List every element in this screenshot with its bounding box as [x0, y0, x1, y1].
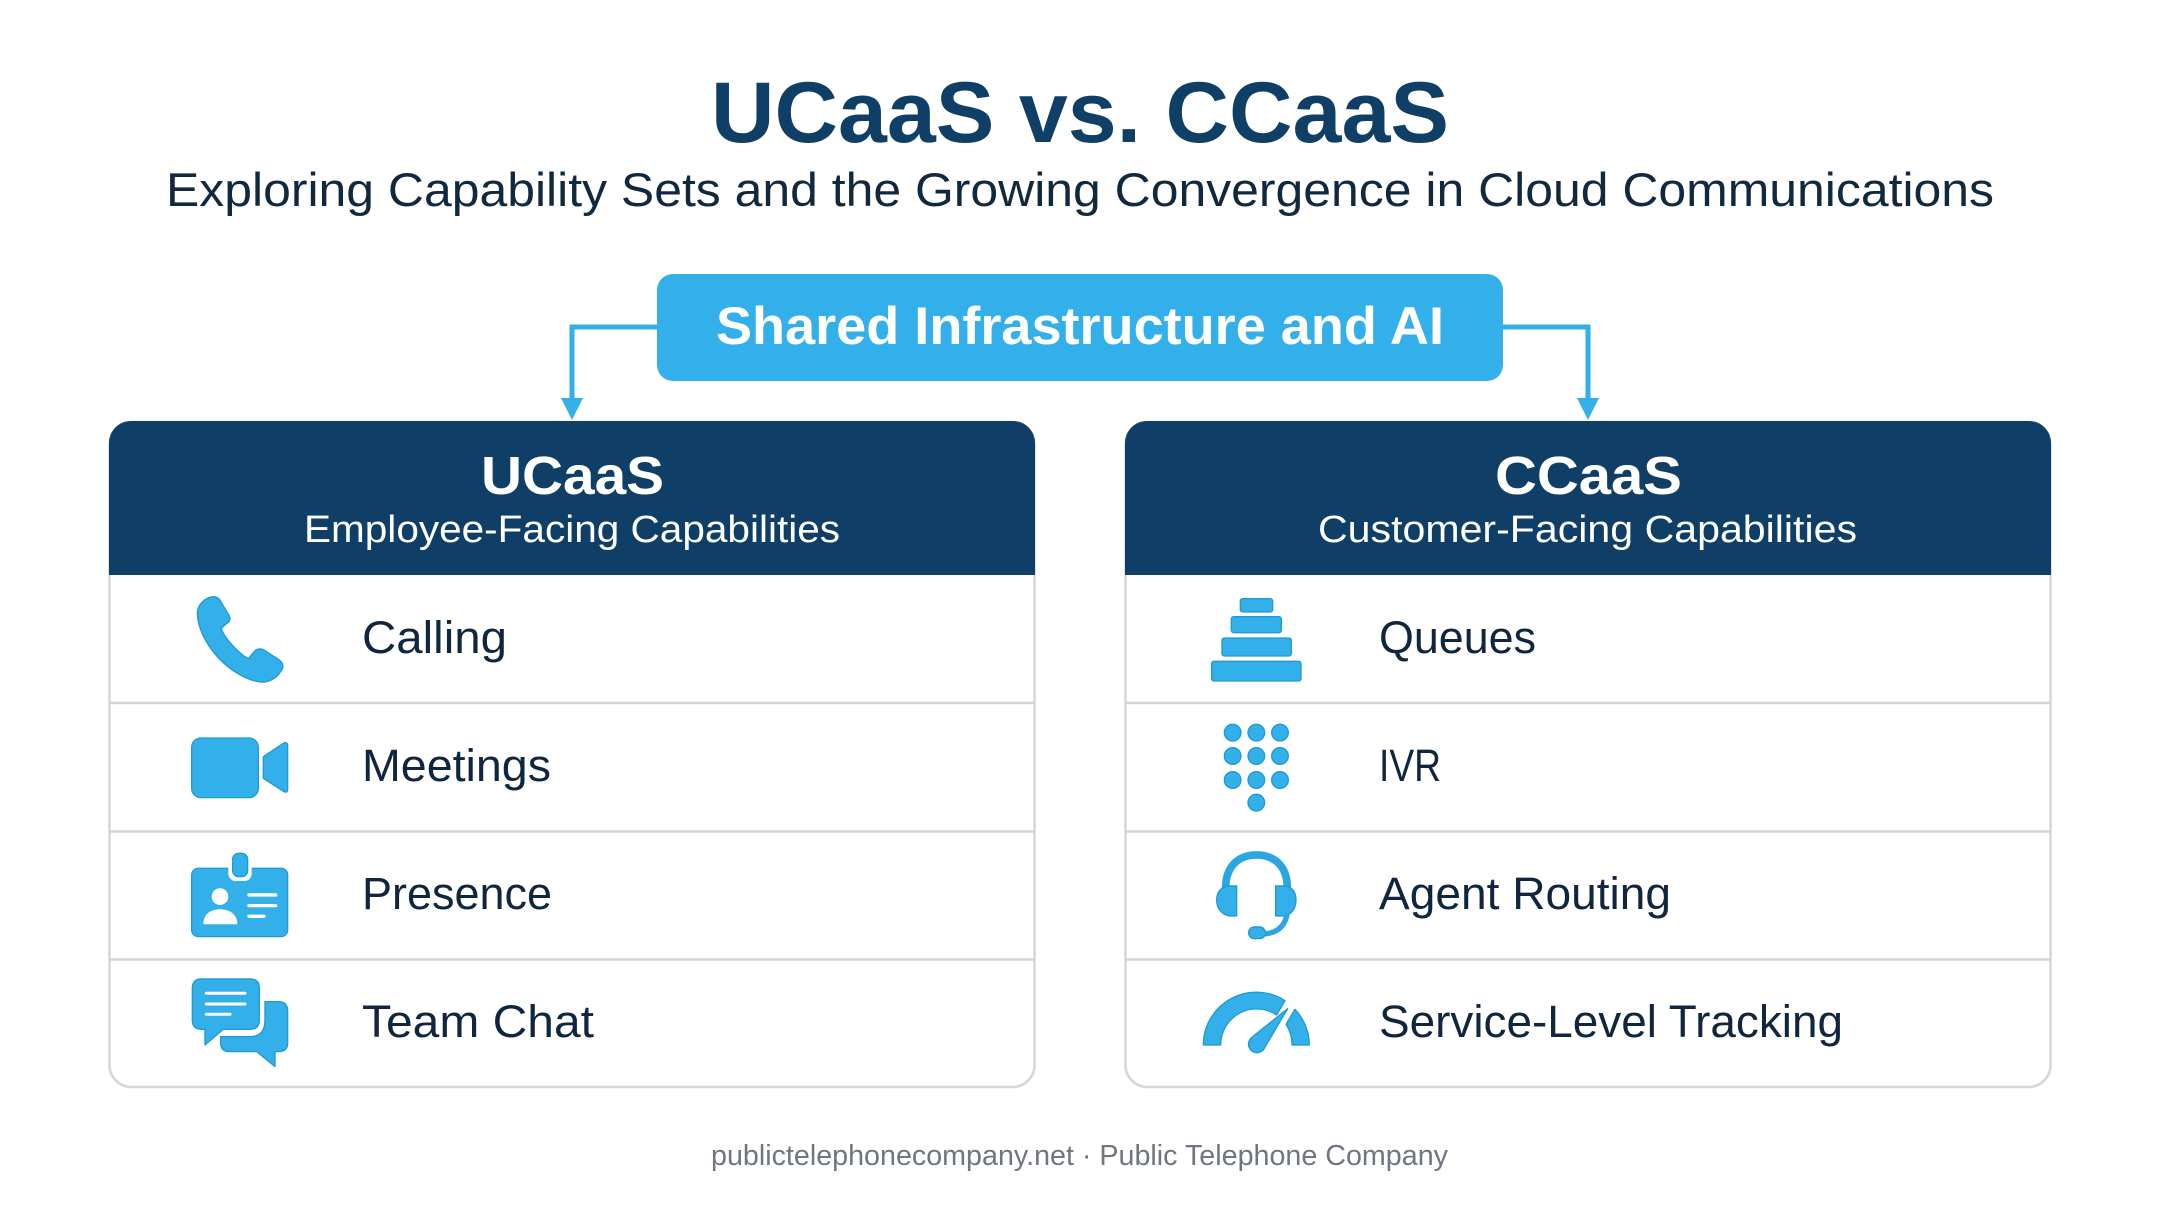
- icon: queue stack: [1212, 599, 1301, 681]
- banner: shared infrastructure and AI: [657, 274, 1503, 381]
- row: Team Chat: Team Chat: [362, 996, 595, 1047]
- panel: CCaaS: [1125, 421, 2051, 1087]
- icon: phone: [197, 597, 283, 682]
- row: Calling: [197, 597, 507, 682]
- row: Presence: [192, 850, 552, 937]
- arrow: shared layer to UCaaS: [561, 327, 658, 420]
- icon: gauge: [1203, 992, 1309, 1053]
- row: Queues: Queues: [1379, 612, 1536, 663]
- row: Service-Level Tracking: Service-Level Tracking: [1379, 996, 1843, 1047]
- row: Agent Routing: Agent Routing: [1379, 868, 1671, 919]
- icon: ID badge: [192, 850, 288, 937]
- title: UCaaS vs. CCaaS: [711, 65, 1449, 161]
- panel: UCaaS: [109, 421, 1035, 1087]
- row: Calling: Calling: [362, 612, 507, 663]
- subtitle: Exploring Capability Sets and the Growing Convergence in Cloud Communications: [166, 163, 1994, 216]
- icon: keypad: [1224, 724, 1288, 811]
- row: Presence: Presence: [362, 868, 552, 919]
- icon: headset: [1217, 855, 1296, 939]
- footer: publictelephonecompany.net · Public Telephone Company: [711, 1140, 1448, 1172]
- row: IVR: IVR: [1379, 740, 1441, 791]
- UCaaS heading: UCaaS: [481, 446, 664, 506]
- UCaaS header background: [109, 421, 1035, 575]
- row: Agent Routing: [1217, 855, 1671, 939]
- UCaaS subheading: Employee-Facing Capabilities: [304, 509, 840, 551]
- row: Queues: [1212, 599, 1536, 681]
- CCaaS subheading: Customer-Facing Capabilities: [1318, 509, 1857, 551]
- arrow: shared layer to CCaaS: [1502, 327, 1599, 420]
- icon: chat bubbles: [192, 979, 288, 1067]
- row: Meetings: [192, 738, 551, 798]
- CCaaS heading: CCaaS: [1495, 446, 1682, 506]
- row: Team Chat: [192, 979, 595, 1067]
- row: Service-Level Tracking: [1203, 992, 1843, 1053]
- CCaaS header background: [1125, 421, 2051, 575]
- banner: shared infrastructure and AI: Shared Infrastructure and AI: [716, 297, 1444, 356]
- icon: video camera: [192, 738, 288, 798]
- row: Meetings: Meetings: [362, 740, 551, 791]
- row: IVR: [1224, 724, 1441, 811]
